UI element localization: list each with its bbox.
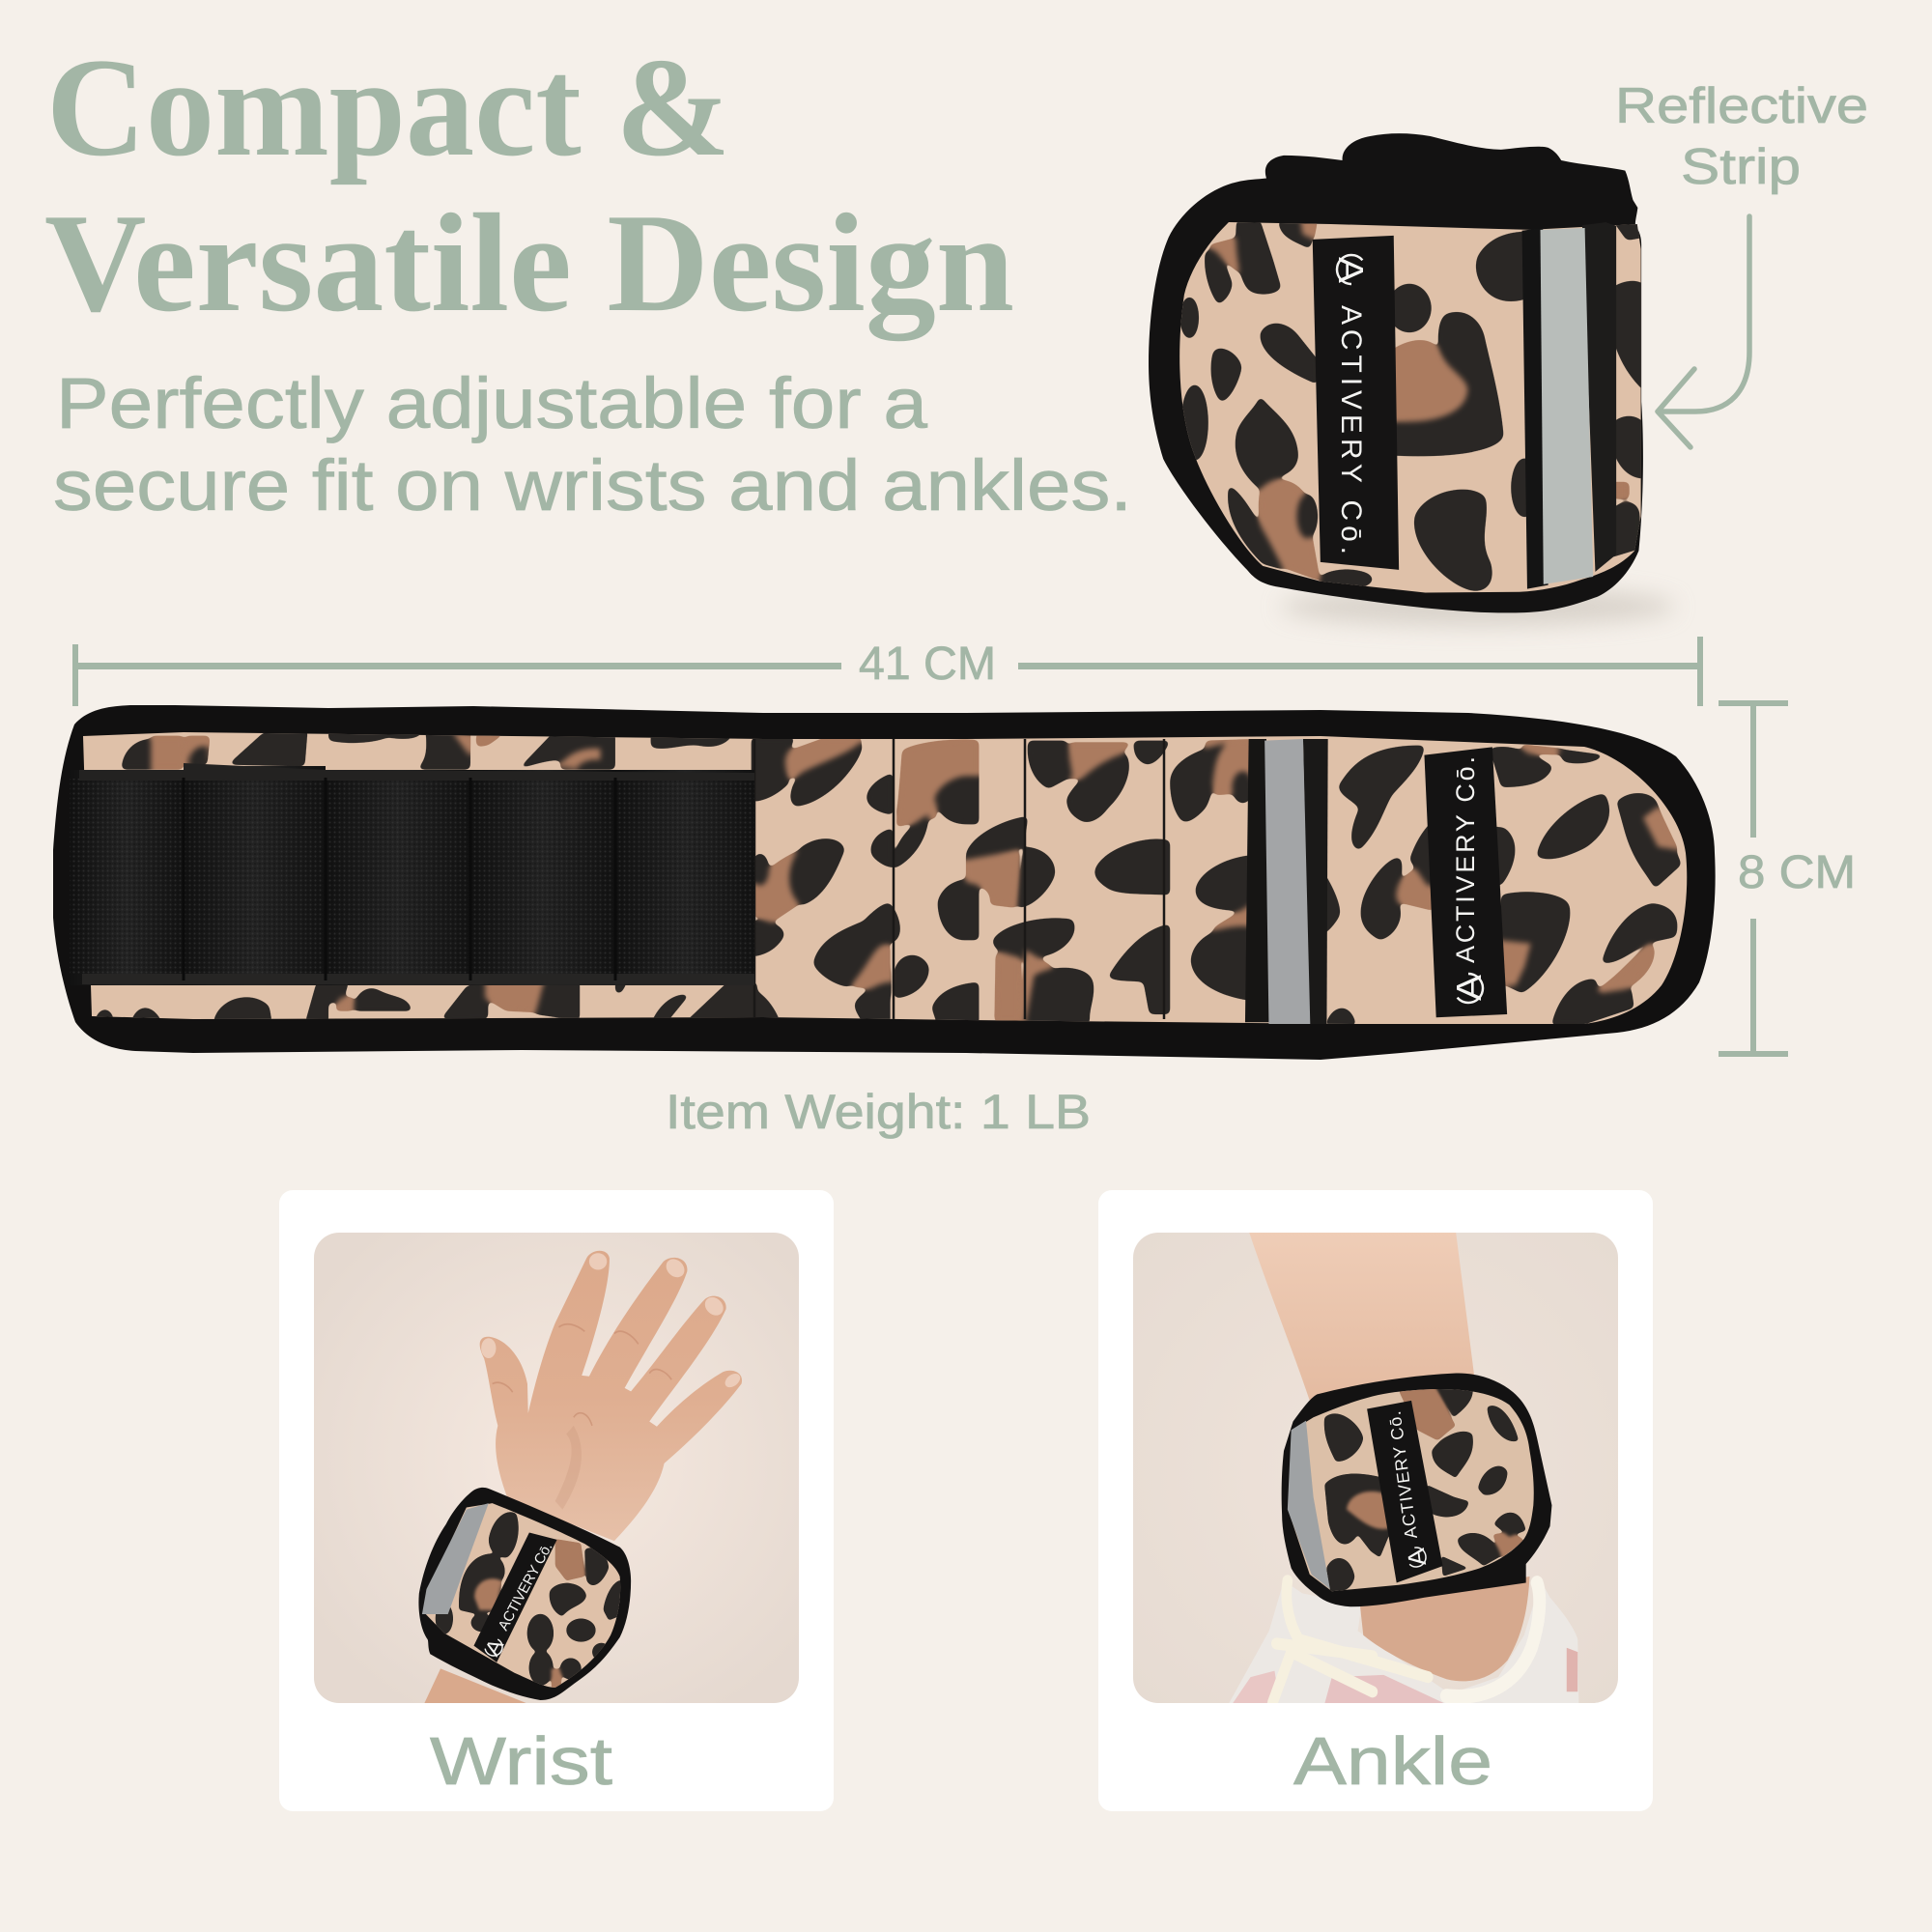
arrow: to reflective strip bbox=[1658, 216, 1749, 447]
strip and label on ankle band bbox=[1288, 1401, 1443, 1589]
dimension: 41 CM width bbox=[72, 637, 1703, 706]
panel: ankle: Ankle bbox=[1293, 1723, 1492, 1799]
dimension: 8 CM height: 8 CM bbox=[1738, 847, 1856, 898]
folded cuff product photo: A bbox=[1331, 257, 1371, 283]
callout: reflective strip label bbox=[1615, 78, 1868, 195]
subtitle: secure fit on wrists and ankles. bbox=[53, 445, 1132, 526]
forearm and hand bbox=[424, 1251, 742, 1704]
strip and label on wristband bbox=[422, 1503, 557, 1662]
unrolled strap product photo bbox=[53, 705, 1716, 1060]
wristband on ankle bbox=[1282, 1374, 1551, 1606]
shadow under folded cuff bbox=[1280, 587, 1676, 626]
dimension: 8 CM height bbox=[1719, 700, 1856, 1057]
velcro hook panel with five pockets bbox=[70, 763, 754, 985]
strap reflective strip bbox=[1245, 739, 1507, 1024]
panel: ankle: ACTIVERY Cō. bbox=[1385, 1410, 1421, 1540]
unrolled strap product photo: A bbox=[1449, 975, 1489, 1001]
panel: wrist: A bbox=[480, 1634, 508, 1660]
pocket seams bbox=[754, 739, 1164, 1019]
subtitle bbox=[53, 363, 1132, 526]
folded cuff product photo: ACTIVERY Cō. bbox=[1335, 305, 1367, 554]
panel: ankle: A bbox=[1403, 1547, 1432, 1568]
dimension: 41 CM width: 41 CM bbox=[859, 639, 996, 690]
folded cuff product photo bbox=[1149, 133, 1648, 612]
panel: wrist: Wrist bbox=[430, 1723, 612, 1799]
subtitle: Perfectly adjustable for a bbox=[56, 363, 928, 443]
leopard spots left half bbox=[95, 729, 979, 1026]
callout: reflective strip label: Reflective bbox=[1615, 78, 1868, 134]
wristband on wrist bbox=[418, 1488, 631, 1700]
panel: ankle bbox=[1098, 1190, 1653, 1811]
panel: wrist: ACTIVERY Cō. bbox=[496, 1540, 556, 1634]
title: Versatile Design bbox=[44, 185, 1014, 341]
leg and sneaker bbox=[1229, 1231, 1578, 1704]
reflective strip on cuff bbox=[1313, 222, 1616, 589]
panel: wrist bbox=[279, 1190, 834, 1811]
unrolled strap product photo: ACTIVERY Cō. bbox=[1451, 756, 1480, 963]
leopard spots right half bbox=[966, 739, 1682, 1026]
item weight caption: Item Weight: 1 LB bbox=[666, 1085, 1091, 1139]
title bbox=[44, 29, 1014, 341]
title: Compact & bbox=[46, 29, 730, 185]
callout: reflective strip label: Strip bbox=[1681, 139, 1801, 195]
divider shading between pockets bbox=[184, 778, 615, 980]
